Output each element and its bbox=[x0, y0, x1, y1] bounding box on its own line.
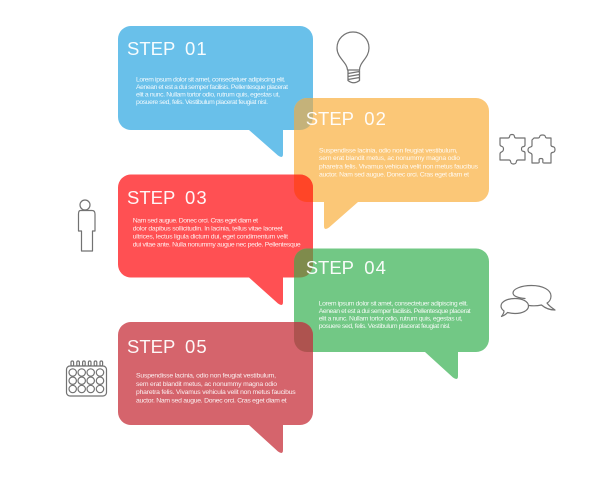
heading: step 05: STEP bbox=[127, 336, 175, 357]
text block: step 05 bbox=[136, 372, 296, 405]
bubble shape: step 05 bbox=[118, 322, 313, 453]
text block: step 03: Nam sed augue. Donec orci. Cras eget diam et bbox=[133, 218, 258, 225]
heading: step 04: STEP bbox=[306, 257, 354, 278]
text block: step 02 bbox=[319, 147, 479, 178]
text block: step 03: ultrices, lectus ligula dictum dui, eget condimentum velit bbox=[133, 234, 288, 241]
heading: step 01: 01 bbox=[185, 38, 208, 59]
text block: step 04: Aenean et est a dui semper facilisis. Pellentesque placerat bbox=[319, 308, 471, 315]
icon: speech bubbles bbox=[501, 286, 555, 316]
heading: step 02: STEP bbox=[306, 108, 354, 129]
text block: step 01: Aenean et est a dui semper facilisis. Pellentesque placerat bbox=[136, 84, 288, 91]
heading: step 04: 04 bbox=[364, 257, 387, 278]
text block: step 01 bbox=[136, 76, 288, 106]
panel: step 02 orange speech bubble bbox=[294, 98, 489, 229]
text block: step 04: posuere sed, felis. Vestibulum placerat feugiat nisl. bbox=[319, 323, 451, 330]
text block: step 01: Lorem ipsum dolor sit amet, consectetuer adipiscing elit. bbox=[136, 76, 286, 83]
text block: step 05: auctor. Nam sed augue. Donec orci. Cras eget diam et bbox=[136, 398, 287, 405]
overlap with step 02 bbox=[294, 174, 313, 202]
panel: step 05 dark red speech bubble bbox=[118, 322, 313, 453]
panel: step 04 green speech bubble bbox=[294, 248, 489, 379]
text block: step 01: elit a nunc. Nullam tortor odio, rutrum quis, egestas ut, bbox=[136, 91, 280, 98]
text block: step 04 bbox=[319, 300, 471, 330]
icon: puzzle pieces bbox=[500, 134, 555, 164]
heading: step 05: 05 bbox=[185, 336, 208, 357]
overlap with step 01 bbox=[294, 98, 313, 130]
text block: step 02: pharetra felis. Vivamus vehicula velit non metus faucibus bbox=[319, 163, 479, 170]
text block: step 03 bbox=[133, 218, 301, 248]
text block: step 02: auctor. Nam sed augue. Donec orci. Cras eget diam et bbox=[319, 171, 469, 178]
heading: step 01: STEP bbox=[127, 38, 175, 59]
text block: step 05: sem erat blandit metus, ac nonummy magna odio bbox=[136, 381, 277, 388]
text block: step 01: posuere sed, felis. Vestibulum placerat feugiat nisl. bbox=[136, 99, 268, 106]
icon: calendar bbox=[66, 361, 106, 396]
panel: step 01 blue speech bubble bbox=[118, 26, 313, 157]
bubble shape: step 02 bbox=[294, 98, 489, 229]
icon: person bbox=[78, 200, 95, 251]
icon: light bulb bbox=[337, 32, 369, 83]
infographic canvas bbox=[66, 26, 556, 453]
bubble shape: step 03 bbox=[118, 174, 313, 305]
heading: step 03: 03 bbox=[185, 187, 208, 208]
heading: step 03: STEP bbox=[127, 187, 175, 208]
overlap with step 04 bbox=[294, 322, 313, 352]
heading: step 02: 02 bbox=[364, 108, 387, 129]
panel: step 03 red speech bubble bbox=[118, 174, 313, 305]
text block: step 05: Suspendisse lacinia, odio non feugiat vestibulum, bbox=[136, 372, 276, 379]
bubble shape: step 01 bbox=[118, 26, 313, 157]
text block: step 04: elit a nunc. Nullam tortor odio, rutrum quis, egestas ut, bbox=[319, 315, 463, 322]
text block: step 03: dolor dapibus sollicitudin. In lacinia, tellus vitae laoreet bbox=[133, 225, 283, 232]
text block: step 02: Suspendisse lacinia, odio non feugiat vestibulum, bbox=[319, 147, 458, 154]
text block: step 05: pharetra felis. Vivamus vehicula velit non metus faucibus bbox=[136, 389, 296, 396]
overlap with step 03 bbox=[294, 248, 313, 278]
text block: step 03: dui vitae ante. Nulla nonummy augue nec pede. Pellentesque bbox=[133, 241, 301, 248]
text block: step 02: sem erat blandit metus, ac nonummy magna odio bbox=[319, 155, 460, 162]
bubble shape: step 04 bbox=[294, 248, 489, 379]
text block: step 04: Lorem ipsum dolor sit amet, consectetuer adipiscing elit. bbox=[319, 300, 468, 307]
